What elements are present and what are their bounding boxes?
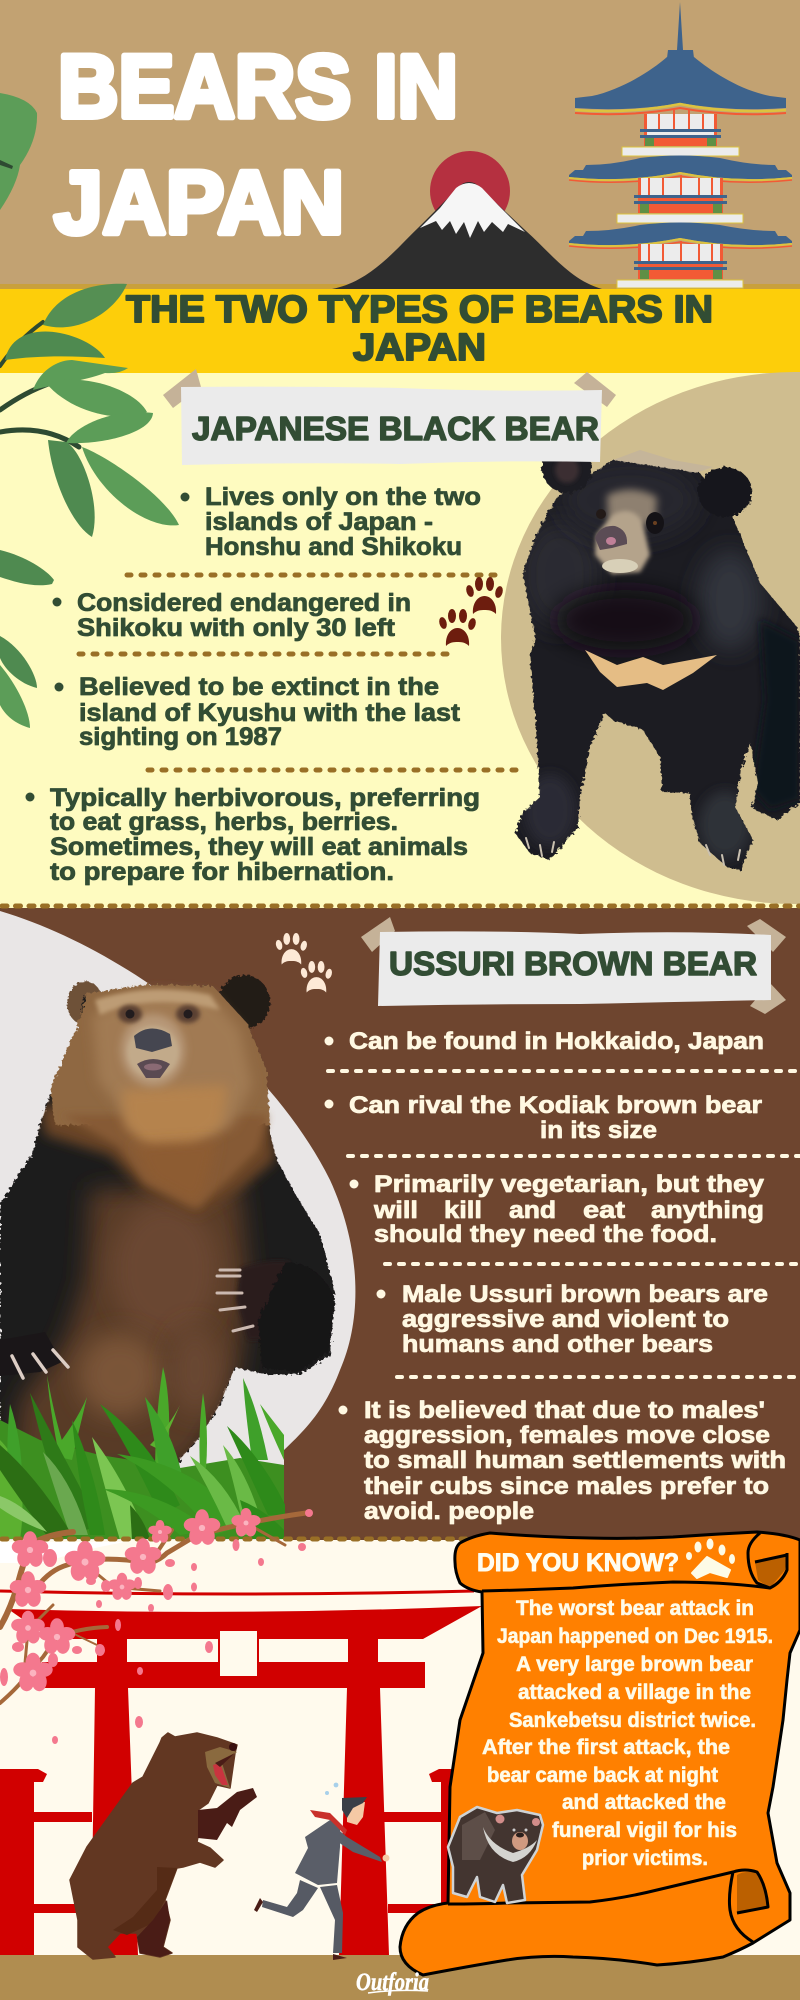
- fact: extinct: Believed to be extinct in the: [79, 673, 439, 701]
- pagoda top tier: [575, 57, 786, 156]
- fact: diet: to prepare for hibernation.: [50, 858, 394, 886]
- illustration: Mount Fuji with red sun: [332, 151, 602, 289]
- fact: diet: Sometimes, they will eat animals: [50, 833, 468, 861]
- fact: aggression: humans and other bears: [402, 1331, 713, 1358]
- fact: extinct: [54, 673, 461, 751]
- story text: After the first attack, the: [482, 1736, 730, 1759]
- illustration: cherry blossom branches: [0, 1508, 313, 1744]
- ears: [542, 443, 752, 517]
- fact: endangered: Considered endangered in: [77, 589, 411, 617]
- section: brown bear panel background: [0, 908, 800, 1540]
- section: yellow subtitle band: [0, 284, 800, 373]
- subtitle: JAPAN: [353, 327, 486, 369]
- illustration: fleeing businessman: [254, 1783, 390, 1960]
- fact: diet: to eat grass, herbs, berries.: [50, 808, 398, 836]
- claws: [526, 838, 740, 865]
- title: JAPAN: [54, 152, 344, 252]
- fact: females and cubs: aggression, females move close: [364, 1422, 770, 1449]
- section: black bear panel background: [0, 373, 800, 908]
- jacket: [295, 1820, 340, 1885]
- title: [54, 36, 458, 252]
- chest marking: [585, 650, 717, 690]
- fact: diet: should they need the food.: [374, 1221, 717, 1248]
- fact: aggression: [376, 1281, 768, 1358]
- fact: diet: eat: [583, 1197, 625, 1224]
- story text: prior victims.: [582, 1847, 708, 1870]
- illustration: pagoda: [569, 2, 792, 288]
- heading: did you know: DID YOU KNOW?: [477, 1549, 679, 1577]
- fact: females and cubs: avoid. people: [364, 1498, 534, 1525]
- section: header background: [0, 0, 800, 285]
- icon: white claw paw: [686, 1538, 735, 1578]
- muzzle and roaring mouth: [205, 1743, 237, 1788]
- fact: endangered: [52, 589, 411, 642]
- arm: [335, 1827, 382, 1862]
- eyes: [118, 1005, 200, 1023]
- fact: size: [324, 1092, 762, 1144]
- icon: red paw prints: [438, 577, 504, 646]
- illustration: Ussuri brown bear: [0, 975, 335, 1510]
- bullet list: black bear facts: [26, 483, 524, 886]
- title: BEARS IN: [58, 36, 458, 136]
- illustration: cartoon roaring bear: [70, 1733, 257, 1959]
- branches: [0, 1513, 306, 1703]
- fact: diet: will: [373, 1197, 418, 1224]
- raised arm: [198, 1788, 257, 1840]
- illustration: Japanese black bear: [515, 443, 800, 870]
- bullet list: brown bear facts: [324, 1028, 800, 1525]
- story text: A very large brown bear: [516, 1653, 753, 1676]
- story text: funeral vigil for his: [552, 1819, 737, 1842]
- story text: bear came back at night: [487, 1764, 718, 1787]
- tape pieces: [361, 917, 786, 1014]
- top banana leaf: [0, 93, 37, 210]
- subtitle: [126, 289, 713, 369]
- belly fur: [10, 1185, 250, 1490]
- section: ground strip: [0, 1955, 800, 2000]
- scarf: [310, 1810, 347, 1835]
- lower roll end: [448, 1870, 768, 1942]
- heading banner: Japanese black bear: JAPANESE BLACK BEAR: [192, 410, 599, 447]
- fact: females and cubs: to small human settlements with: [364, 1447, 786, 1474]
- blossoms: [10, 1508, 261, 1691]
- fact: females and cubs: [338, 1397, 786, 1525]
- section: did you know panel background: [0, 1540, 800, 1956]
- belly shade: [113, 1867, 177, 1935]
- illustration: white haze under branch: [0, 1542, 125, 1563]
- top banner fold line: [482, 1582, 770, 1591]
- shoes: [254, 1898, 347, 1960]
- story text: Sankebetsu district twice.: [509, 1709, 756, 1732]
- face: [607, 489, 657, 525]
- illustration: red torii gate: [0, 1591, 482, 1955]
- fact: habitat: Lives only on the two: [205, 483, 481, 511]
- top roll end: [748, 1533, 787, 1588]
- ears: [67, 975, 270, 1029]
- fact: diet: Primarily vegetarian, but they: [374, 1171, 765, 1198]
- falling petals: [0, 1509, 313, 1744]
- logo: Outforia: Outforia: [356, 1969, 429, 1996]
- sweat drops: [325, 1783, 338, 1795]
- fact: endangered: Shikoku with only 30 left: [77, 614, 396, 642]
- fact: diet: [350, 1171, 765, 1248]
- fact: diet: Typically herbivorous, preferring: [50, 784, 480, 812]
- fact: extinct: sighting on 1987: [79, 723, 282, 751]
- fact: aggression: aggressive and violent to: [402, 1306, 729, 1333]
- subtitle: THE TWO TYPES OF BEARS IN: [126, 289, 713, 331]
- fact: diet: kill: [444, 1197, 482, 1224]
- illustration: green grass: [0, 1367, 290, 1540]
- fact: habitat: islands of Japan -: [205, 508, 433, 536]
- story text: The worst bear attack in: [516, 1597, 754, 1620]
- fact: females and cubs: their cubs since males prefer to: [364, 1473, 769, 1500]
- story text: Japan happened on Dec 1915.: [497, 1625, 773, 1648]
- illustration: small cartoon black bear: [448, 1807, 543, 1903]
- heading banner: Ussuri brown bear: USSURI BROWN BEAR: [389, 945, 757, 982]
- left paw with claws: [0, 1332, 68, 1378]
- fact: extinct: island of Kyushu with the last: [79, 699, 461, 727]
- fact: habitat: Honshu and Shikoku: [205, 533, 462, 561]
- fact: diet: [26, 784, 480, 886]
- shoulder brown fade: [40, 1105, 275, 1215]
- fact: size: in its size: [540, 1117, 657, 1144]
- leaf cluster: [0, 284, 179, 728]
- fact: diet: anything: [651, 1197, 764, 1224]
- pagoda spire: [667, 2, 694, 58]
- story text: attacked a village in the: [518, 1681, 751, 1704]
- story text: and attacked the: [562, 1791, 726, 1814]
- illustration: bamboo leaves: [0, 93, 179, 728]
- fact: size: Can rival the Kodiak brown bear: [349, 1092, 762, 1119]
- divider: dotted section edge: [2, 904, 800, 908]
- heading banner: Ussuri brown bear: [361, 917, 786, 1014]
- fact: diet: and: [509, 1197, 556, 1224]
- heading banner: Japanese black bear: [163, 369, 616, 465]
- back leg: [137, 1900, 172, 1957]
- illustration: tan circle behind black bear: [501, 372, 800, 904]
- body fur shading: [10, 1105, 275, 1490]
- story text: [482, 1597, 773, 1870]
- fact: females and cubs: It is believed that due to males': [364, 1397, 765, 1424]
- nose and mouth: [134, 1028, 172, 1078]
- right small gate post: [384, 1769, 456, 1955]
- fact: location: Can be found in Hokkaido, Japan: [349, 1028, 764, 1055]
- pagoda bottom tier: [569, 222, 792, 288]
- left small gate post: [0, 1769, 92, 1955]
- illustration: pale circle behind brown bear: [0, 911, 355, 1540]
- pagoda middle tier: [569, 156, 792, 223]
- fact: habitat: [180, 483, 481, 561]
- right paw with claws: [217, 1261, 335, 1372]
- head fur: [50, 984, 270, 1125]
- fact: aggression: Male Ussuri brown bears are: [402, 1281, 768, 1308]
- illustration: orange scroll: [400, 1532, 800, 1975]
- head: [342, 1797, 367, 1825]
- tape pieces: [163, 369, 616, 408]
- legs: [262, 1880, 343, 1953]
- shading clipped to the body: [520, 460, 800, 859]
- divider: dotted section edge: [2, 1536, 470, 1542]
- leaf stems: [0, 322, 79, 447]
- dark body: [0, 984, 335, 1510]
- icon: cream paw prints: [275, 933, 333, 992]
